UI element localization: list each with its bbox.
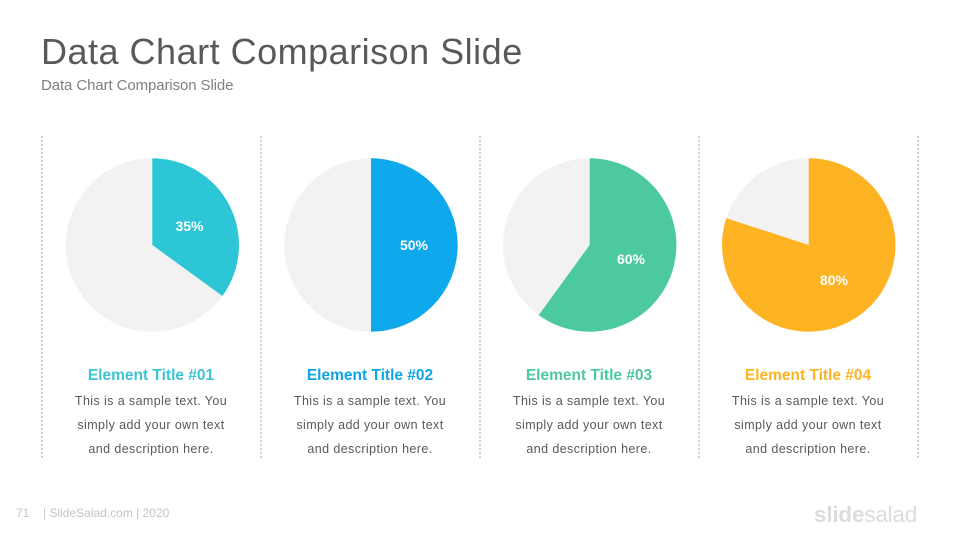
pie chart: 60% [503,158,676,332]
element 4 text: and description here. [745,442,871,456]
element 3 text: This is a sample text. You [513,394,665,408]
pie chart: 80% [722,158,895,332]
element 4 text: Element Title #04 [745,367,871,384]
logo: slidesalad [814,502,917,527]
element 4 text [732,367,884,456]
element 3 text: and description here. [526,442,652,456]
pie chart: 50% [284,158,458,332]
pie chart: 80%: 80% [820,272,849,288]
element 4 text: This is a sample text. You [732,394,884,408]
element 1 text [75,367,227,456]
title: Data Chart Comparison Slide [41,31,523,72]
subtitle: Data Chart Comparison Slide [41,77,233,94]
element 2 text: and description here. [307,442,433,456]
element 2 text: Element Title #02 [307,367,433,384]
element 3 text: Element Title #03 [526,367,652,384]
element 1 text: and description here. [88,442,214,456]
element 2 text: simply add your own text [296,418,444,432]
element 4 text: simply add your own text [734,418,882,432]
element 2 text [294,367,446,456]
pie chart: 60%: 60% [617,251,646,267]
element 1 text: Element Title #01 [88,367,214,384]
page number: 71 [16,506,29,520]
element 1 text: This is a sample text. You [75,394,227,408]
pie chart: 35% [66,158,239,332]
pie chart: 50%: 50% [400,237,429,253]
element 3 text: simply add your own text [515,418,663,432]
element 3 text [513,367,665,456]
footer text: | SlideSalad.com | 2020 [43,506,169,520]
element 1 text: simply add your own text [77,418,225,432]
element 2 text: This is a sample text. You [294,394,446,408]
pie chart: 35%: 35% [175,218,204,234]
